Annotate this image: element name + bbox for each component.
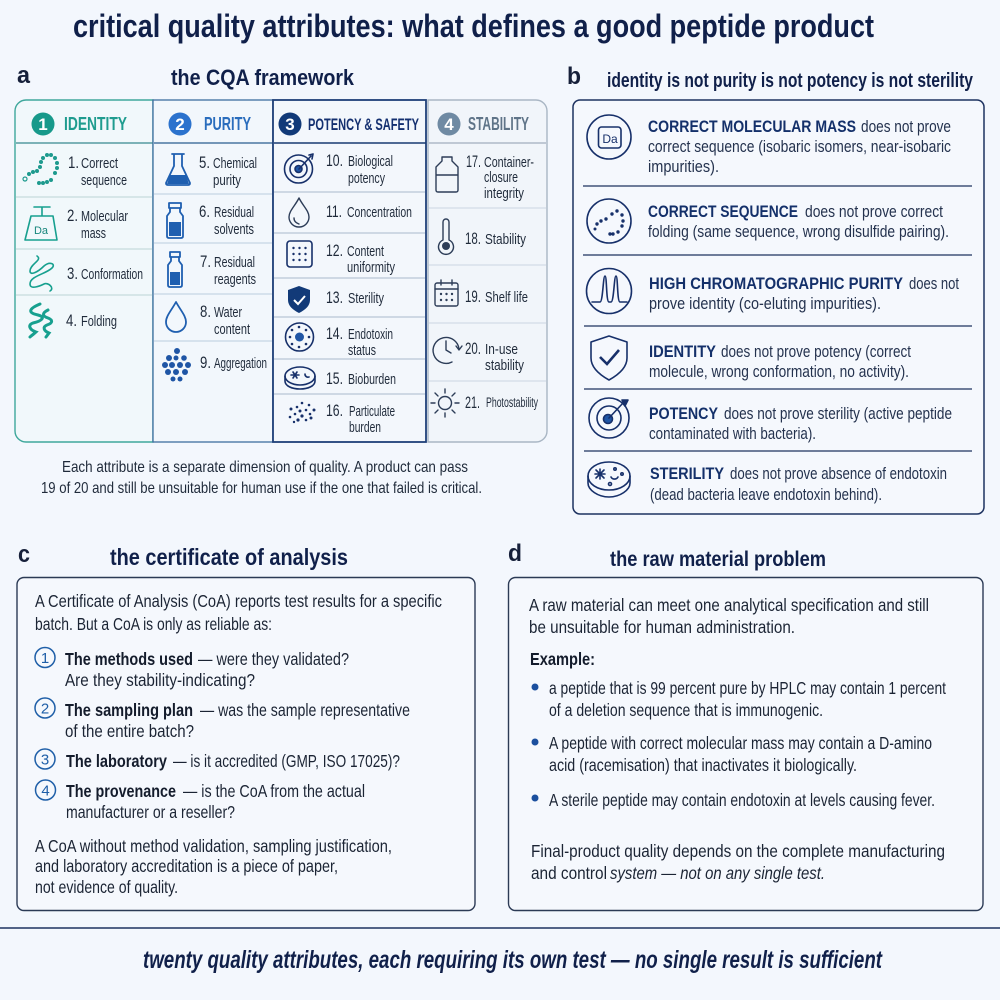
panel d frame (508, 578, 983, 910)
bullet 1: of a deletion sequence that is immunogenic. (549, 700, 823, 720)
column: stability (428, 100, 547, 442)
label 16: burden (349, 419, 381, 436)
label 18: 18. (465, 230, 481, 248)
icon: concentration drop (289, 198, 309, 227)
label 21: 21. (465, 394, 480, 412)
label 10: 10. (326, 152, 343, 170)
row: identity: molecule, wrong conformation, no activity). (649, 362, 909, 381)
label 10: Biological (348, 153, 393, 170)
label 21: Photostability (486, 395, 538, 410)
label 19: Shelf life (485, 289, 528, 306)
label 6: solvents (214, 221, 254, 238)
closing text: system — not on any single test. (610, 863, 825, 883)
item 2: 2 (41, 700, 49, 718)
closing text: and laboratory accreditation is a piece of paper, (35, 856, 338, 876)
icon: uniformity grid (287, 241, 312, 267)
row: correct molecular mass: does not prove (861, 117, 951, 136)
icon: container (436, 157, 458, 192)
row: correct molecular mass: impurities). (648, 157, 719, 176)
heading d: the raw material problem (610, 548, 826, 571)
row: sterility: (dead bacteria leave endotoxin behind). (650, 485, 882, 504)
icon: endotoxin (286, 323, 314, 351)
label 13: Sterility (348, 290, 384, 307)
item 2: — was the sample representative (200, 700, 410, 720)
icon: aggregation dots (162, 348, 191, 382)
header: stability: 4 (444, 115, 454, 134)
item 3 (35, 749, 400, 771)
label 8: 8. (200, 303, 211, 321)
row: correct molecular mass (587, 115, 951, 176)
header: potency and safety (278, 112, 419, 136)
column: purity (153, 100, 273, 442)
label 1: sequence (81, 172, 127, 189)
item 3: The laboratory (66, 751, 167, 771)
label 8 (200, 303, 251, 338)
row: high chromatographic purity: does not (909, 274, 959, 293)
row: potency: POTENCY (649, 404, 719, 423)
header: potency and safety: 3 (285, 115, 295, 134)
item 2 (35, 698, 410, 741)
header: stability (438, 112, 529, 136)
panel b frame (573, 100, 984, 514)
note under framework: Each attribute is a separate dimension of quality. A product can pass (62, 459, 468, 476)
label 12: 12. (326, 242, 343, 260)
label 7: Residual (214, 254, 255, 271)
label 5: purity (213, 172, 241, 189)
label 11: 11. (326, 203, 342, 221)
item 4: 4 (41, 782, 50, 800)
label 17: 17. (466, 153, 481, 171)
item 1 (35, 648, 349, 690)
label 11: Concentration (347, 204, 412, 221)
label 20: In-use (485, 341, 518, 358)
panel a: the CQA framework (15, 62, 547, 497)
row: identity: IDENTITY (649, 342, 717, 361)
label 2: Molecular (81, 208, 128, 225)
bullet 2: acid (racemisation) that inactivates it biologically. (549, 755, 857, 775)
label 2: mass (81, 225, 106, 242)
row: sterility: STERILITY (650, 464, 725, 483)
label 4: 4. (66, 312, 77, 330)
icon: water drop (166, 302, 186, 332)
intro text (35, 591, 442, 634)
icon: thermometer (438, 219, 454, 254)
label 12: uniformity (347, 259, 395, 276)
label 6: 6. (199, 203, 210, 221)
icon: clock (433, 337, 462, 363)
row: correct sequence: does not prove correct (805, 202, 943, 221)
label 13: 13. (326, 289, 343, 307)
label 13 (326, 289, 384, 307)
label 20: stability (485, 357, 524, 374)
intro text: A raw material can meet one analytical specification and still (529, 595, 929, 615)
label 9: 9. (200, 354, 211, 372)
intro text: be unsuitable for human administration. (529, 617, 795, 637)
panel c frame (17, 578, 475, 910)
closing text (531, 841, 945, 883)
label 16: 16. (326, 402, 343, 420)
label 1: 1. (68, 154, 79, 172)
header: identity: 1 (38, 115, 48, 134)
label 21 (465, 394, 538, 412)
icon: conformation squiggle (30, 256, 53, 291)
header: purity (168, 112, 251, 136)
header: identity (32, 112, 127, 136)
row: potency (589, 398, 952, 443)
label 14: status (348, 342, 376, 359)
icon: reagent bottle (168, 252, 182, 287)
label 2: 2. (67, 207, 78, 225)
row: potency: contaminated with bacteria). (649, 424, 816, 443)
label 10 (326, 152, 393, 187)
panel letter c: c (18, 541, 30, 568)
label 3: Conformation (81, 266, 143, 283)
label 4 (66, 312, 117, 330)
label 9 (200, 354, 267, 372)
label 17: Container- (484, 154, 534, 171)
label 20: 20. (465, 340, 481, 358)
icon: folding helix (30, 304, 52, 337)
item 1: Are they stability-indicating? (65, 670, 255, 690)
header: purity: 2 (175, 115, 185, 134)
column: identity (15, 100, 153, 442)
label 6: Residual (214, 204, 254, 221)
item 4: manufacturer or a reseller? (66, 802, 235, 822)
label 14: 14. (326, 325, 343, 343)
label 8: Water (214, 304, 242, 321)
label 8: content (214, 321, 251, 338)
label 3 (67, 265, 143, 283)
label 15 (326, 370, 396, 388)
icon: flask (166, 154, 190, 185)
note under framework (41, 459, 482, 497)
label 19 (465, 288, 528, 306)
header: identity: IDENTITY (64, 114, 127, 134)
item 4: The provenance (66, 781, 176, 801)
bullet 2 (532, 733, 932, 775)
label 2 (67, 207, 128, 242)
row: high chromatographic purity: prove identity (co-eluting impurities). (649, 294, 881, 313)
icon: solvent bottle (167, 203, 183, 238)
label 1: Correct (81, 155, 119, 172)
label 12 (326, 242, 395, 276)
label 15: Bioburden (348, 371, 396, 388)
label 7 (200, 253, 256, 288)
label 17: closure (484, 169, 518, 186)
row: high chromatographic purity: HIGH CHROMATOGRAPHIC PURITY (649, 274, 904, 293)
label 19: 19. (465, 288, 481, 306)
label 16: Particulate (349, 403, 395, 420)
label 12: Content (347, 243, 385, 260)
row: identity: does not prove potency (correct (721, 342, 911, 361)
icon: mass weight Da (25, 207, 57, 240)
example label: Example: (530, 649, 595, 669)
heading c: the certificate of analysis (110, 544, 348, 570)
item 3: — is it accredited (GMP, ISO 17025)? (173, 751, 400, 771)
label 1 (68, 154, 127, 189)
icon: peptide beads (23, 153, 59, 185)
item 4: — is the CoA from the actual (183, 781, 365, 801)
item 2: of the entire batch? (65, 721, 194, 741)
closing text: not evidence of quality. (35, 877, 178, 897)
row: correct sequence (587, 199, 949, 243)
intro text: batch. But a CoA is only as reliable as: (35, 614, 272, 634)
column: potency and safety (273, 100, 426, 442)
item 3: 3 (41, 752, 49, 768)
panel letter d: d (508, 540, 522, 567)
label 17 (466, 153, 534, 202)
row: correct molecular mass: CORRECT MOLECULAR MASS (648, 117, 856, 136)
item 1: — were they validated? (198, 649, 349, 669)
label 20 (465, 340, 524, 374)
icon: particles (289, 402, 316, 423)
icon: sun (431, 389, 459, 417)
heading a: the CQA framework (171, 65, 355, 90)
header: purity: PURITY (204, 114, 251, 134)
label 18: Stability (485, 231, 526, 248)
title: critical quality attributes: what defines a good peptide product (73, 8, 874, 44)
bullet 1 (532, 678, 946, 720)
label 17: integrity (484, 185, 524, 202)
icon: shield (288, 286, 310, 313)
closing text (35, 836, 392, 897)
intro text: A Certificate of Analysis (CoA) reports test results for a specific (35, 591, 442, 611)
label 14: Endotoxin (348, 326, 393, 343)
icon: mass weight Da: Da (34, 225, 49, 237)
panel letter b: b (567, 63, 581, 90)
panel letter a: a (17, 62, 31, 89)
label 9: Aggregation (214, 355, 267, 372)
item 2: The sampling plan (65, 700, 193, 720)
icon: petri dish (285, 367, 315, 389)
label 7: reagents (214, 271, 256, 288)
row: high chromatographic purity (586, 268, 959, 314)
label 15: 15. (326, 370, 343, 388)
row: correct sequence: CORRECT SEQUENCE (648, 202, 798, 221)
label 18 (465, 230, 526, 248)
icon: target (284, 154, 313, 183)
item 1: The methods used (65, 649, 193, 669)
label 16 (326, 402, 395, 436)
header: stability: STABILITY (468, 114, 529, 134)
label 10: potency (348, 170, 385, 187)
label 5: 5. (199, 154, 210, 172)
closing text: Final-product quality depends on the complete manufacturing (531, 841, 945, 861)
label 7: 7. (200, 253, 211, 271)
label 4: Folding (81, 313, 117, 330)
header: potency and safety: POTENCY & SAFETY (308, 115, 419, 134)
label 14 (326, 325, 393, 359)
panel c: the certificate of analysis (17, 541, 475, 910)
label 5: Chemical (213, 155, 257, 172)
panel b: identity is not purity (567, 63, 984, 514)
row: sterility (588, 462, 947, 504)
item 1: 1 (41, 650, 49, 667)
label 5 (199, 154, 257, 189)
label 3: 3. (67, 265, 78, 283)
intro text (529, 595, 929, 637)
row: identity (591, 336, 911, 381)
item 4 (36, 780, 365, 822)
icon: calendar (435, 280, 458, 306)
label 6 (199, 203, 254, 238)
note under framework: 19 of 20 and still be unsuitable for human use if the one that failed is critical. (41, 480, 482, 497)
label 11 (326, 203, 412, 221)
panel d: the raw material problem (508, 540, 983, 910)
closing text: and control (531, 863, 607, 883)
row: correct molecular mass: Da (602, 132, 618, 146)
closing text: A CoA without method validation, sampling justification, (35, 836, 392, 856)
